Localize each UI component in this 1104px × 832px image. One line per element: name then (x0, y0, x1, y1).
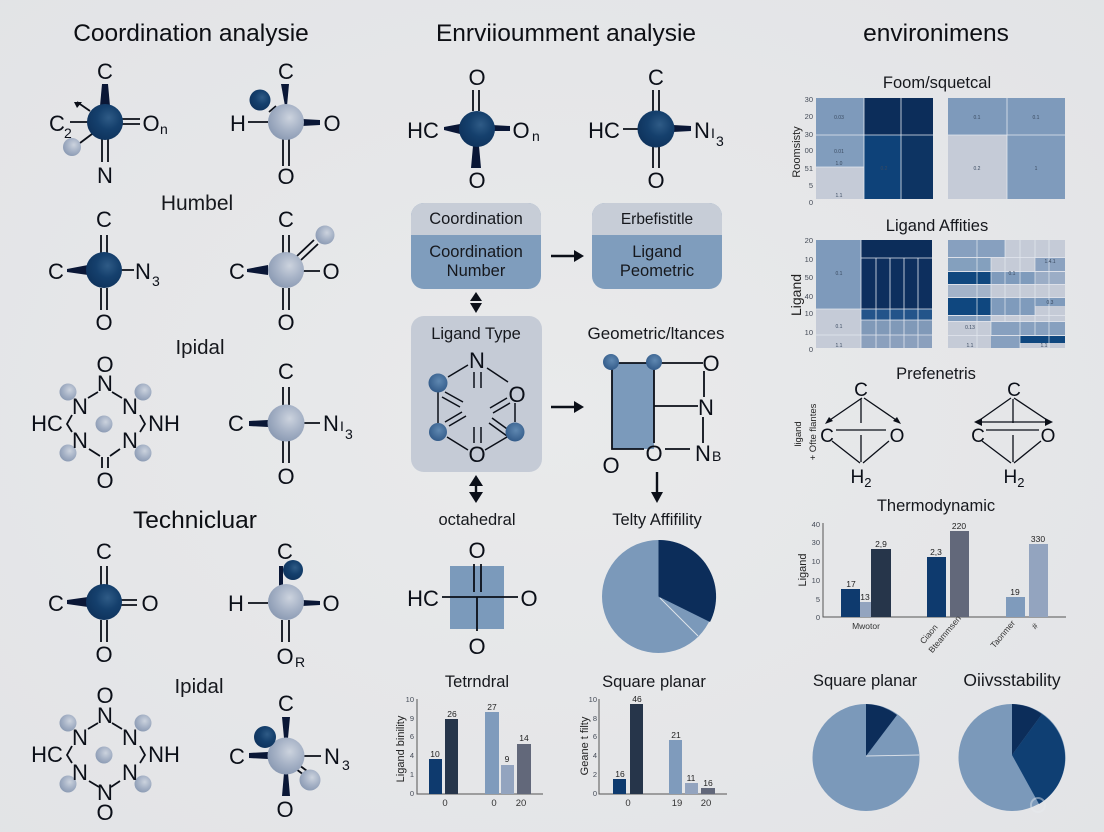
heatmap: top left: 30 (805, 130, 813, 139)
arrow: double vertical lower (469, 475, 483, 503)
bar chart: tetrahedral: 10 (406, 695, 414, 704)
panel: ligand type box (411, 316, 542, 472)
heatmap: top left: 20 (805, 112, 813, 121)
panel: coordination number box: Coordination (429, 243, 523, 261)
molecule: nitrogen ring lower: N (72, 760, 88, 785)
molecule: nitrogen ring lower: O (96, 683, 114, 708)
bar chart: square planar: 0 (625, 798, 631, 809)
panel: ligand geometric box: Peometric (620, 262, 694, 280)
molecule: light centre with two spheres: C (229, 744, 245, 769)
bar chart: square planar: 46 (632, 694, 642, 704)
heading: geometric distances: Geometric/ltances (588, 324, 724, 343)
diagram: left diamond: + Ofte flantes (808, 403, 819, 460)
molecule: nitrogen ring lower: N (72, 725, 88, 750)
molecule: dark centre C N3: N (135, 259, 151, 284)
heatmap: middle left: 50 (805, 273, 813, 282)
arrow: down to affinity (651, 472, 663, 503)
diagram: geometric square: O (702, 351, 720, 376)
molecule: nitrogen ring upper: NH (148, 411, 180, 436)
pie chart: square planar (812, 704, 920, 811)
molecule: HC NI3 dark: HC (588, 118, 620, 143)
molecule: nitrogen ring lower: NH (148, 742, 180, 767)
diagram: right diamond: O (1041, 426, 1055, 447)
molecule: nitrogen ring upper: N (72, 428, 88, 453)
bar chart: thermodynamic: 330 (1031, 534, 1045, 544)
bar chart: thermodynamic: Ligand (797, 553, 809, 587)
bar chart: tetrahedral: 0 (442, 798, 448, 809)
molecule: light centre C N3 (228, 359, 353, 489)
heatmap: top left: 5 (809, 181, 813, 190)
heatmap: middle left: 10 (805, 255, 813, 264)
diagram: right diamond (971, 380, 1055, 490)
panel: ligand geometric box: Erbefistitle (621, 211, 693, 228)
molecule: nitrogen ring lower: O (96, 800, 114, 825)
molecule: nitrogen ring upper: N (122, 394, 138, 419)
molecule: dark centre C N3: O (95, 310, 113, 335)
molecule: nitrogen ring lower: N (97, 703, 113, 728)
molecule: light centre with small sphere: O (322, 259, 340, 284)
bar chart: tetrahedral: 14 (519, 733, 529, 743)
bar chart: thermodynamic (797, 520, 1066, 655)
molecule: light centre C N3: O (277, 464, 295, 489)
diagram: left diamond (793, 380, 904, 490)
bar chart: thermodynamic: 17 (846, 579, 856, 589)
heatmap: top left: 0.01 (834, 149, 844, 155)
diagram: left diamond: C (854, 380, 868, 401)
molecule: dark centre C2 Oh N: O (142, 111, 160, 136)
bar chart: thermodynamic: 40 (812, 520, 820, 529)
molecule: light centre with two spheres: 3 (342, 757, 350, 773)
panel: ligand geometric box (592, 203, 722, 289)
molecule: HC Oh dark (407, 65, 540, 193)
heatmap: top left: 30 (805, 95, 813, 104)
molecule: dark centre C O: O (95, 642, 113, 667)
diagram: geometric square: B (712, 448, 721, 464)
molecule: light centre with two spheres (229, 691, 350, 822)
molecule: light centre with two spheres: N (324, 744, 340, 769)
molecule: dark centre C N3: C (96, 207, 112, 232)
panel: coordination number box: Number (447, 262, 506, 280)
bar chart: square planar: 11 (687, 773, 696, 783)
molecule: light centre with dark sphere: H (228, 591, 244, 616)
bar chart: thermodynamic: 220 (952, 521, 966, 531)
molecule: light centre with dark sphere: R (295, 654, 305, 670)
panel: ligand geometric box: Ligand (632, 243, 682, 261)
diagram: right diamond: H (1004, 467, 1017, 488)
molecule: HC NI3 dark: O (647, 168, 665, 193)
molecule: octahedral square: HC (407, 586, 439, 611)
molecule: HC NI3 dark: I (711, 125, 715, 141)
panel: coordination number box: Coordination (429, 210, 523, 228)
title: coordination analysis: Coordination analysie (73, 20, 309, 47)
heatmap: middle left: Ligand (788, 274, 804, 316)
heatmap: top left: 0.2 (881, 166, 888, 172)
bar chart: thermodynamic: 19 (1010, 587, 1020, 597)
bar chart: tetrahedral: 4 (410, 751, 414, 760)
bar chart: square planar: 16 (615, 769, 625, 779)
bar chart: tetrahedral: 10 (430, 749, 440, 759)
molecule: nitrogen ring upper: N (97, 371, 113, 396)
molecule: HC Oh dark: HC (407, 118, 439, 143)
molecule: dark centre C N3 (48, 207, 160, 335)
bar chart: thermodynamic: 2,9 (875, 539, 887, 549)
molecule: HC NI3 dark: C (648, 65, 664, 90)
heatmap: middle left: 20 (805, 236, 813, 245)
heatmap: top right: 0.2 (974, 166, 981, 172)
heatmap: middle left: 0.1 (836, 271, 843, 277)
molecule: light centre C N3: N (323, 411, 339, 436)
diagram: left diamond: C (820, 426, 834, 447)
heatmap: top left: 0.03 (834, 115, 844, 121)
heading: Technicluar: Technicluar (133, 507, 257, 534)
bar chart: thermodynamic: Ciaon (918, 622, 940, 646)
heading: affinity: Telty Affifility (612, 511, 703, 529)
bar chart: square planar: 10 (589, 695, 597, 704)
molecule: octahedral square: O (468, 634, 486, 659)
molecule: HC Oh dark: O (468, 168, 486, 193)
bar chart: square planar: 20 (701, 798, 711, 809)
heading: overstability: Oiivsstability (963, 670, 1061, 690)
heading: Ipidal: Ipidal (175, 336, 225, 359)
panel: ligand type box: O (468, 442, 486, 467)
molecule: dark centre C O: C (48, 591, 64, 616)
bar chart: tetrahedral: 20 (516, 798, 526, 809)
heatmap: top left: Roomsisty (791, 126, 803, 178)
heatmap: middle left: 0.1 (836, 324, 843, 330)
bar chart: thermodynamic: 30 (812, 538, 820, 547)
bar chart: tetrahedral: 1 (410, 770, 414, 779)
molecule: HC Oh dark: O (468, 65, 486, 90)
heatmap: middle right: 1.1 (967, 343, 974, 349)
heatmap: middle left: 10 (805, 328, 813, 337)
title: environment analysis: Enrviioumment analysie (436, 20, 696, 47)
heatmap: middle right (948, 240, 1065, 349)
bar chart: square planar: 4 (593, 751, 597, 760)
molecule: HC NI3 dark (588, 65, 724, 193)
molecule: light centre C N3: I (340, 418, 344, 434)
molecule: light centre with dark sphere: O (322, 591, 340, 616)
heatmap: middle right: 1.4.1 (1044, 259, 1056, 265)
bar chart: square planar: 16 (703, 778, 713, 788)
diagram: geometric square: N (698, 395, 714, 420)
heatmap: middle right: 0.1 (1009, 271, 1016, 277)
diagram: left diamond: 2 (864, 475, 871, 490)
molecule: light centre with small sphere: C (278, 207, 294, 232)
molecule: nitrogen ring upper: O (96, 352, 114, 377)
molecule: light centre H O O: O (277, 164, 295, 189)
heading: tetrahedral: Tetrndral (445, 673, 509, 691)
heatmap: middle left: 10 (805, 309, 813, 318)
bar chart: tetrahedral (395, 695, 543, 809)
heatmap: top right (948, 98, 1065, 199)
heading: ligand affinities: Ligand Affities (886, 217, 988, 235)
molecule: dark centre C2 Oh N: n (160, 121, 168, 137)
molecule: light centre with small sphere: C (229, 259, 245, 284)
bar chart: thermodynamic: 13 (860, 592, 870, 602)
molecule: nitrogen ring upper (31, 352, 180, 493)
diagram: left diamond: H (851, 467, 864, 488)
heading: square planar: Square planar (602, 673, 706, 691)
heatmap: top left: 51 (805, 164, 813, 173)
diagram: geometric square: N (695, 441, 711, 466)
arrow: coordination to ligand geometry (551, 250, 584, 262)
molecule: dark centre C2 Oh N (49, 59, 168, 188)
molecule: dark centre C2 Oh N: C (49, 111, 65, 136)
molecule: dark centre C O (48, 539, 159, 667)
bar chart: tetrahedral: Ligand binility (395, 715, 407, 782)
heatmap: top left: 00 (805, 146, 813, 155)
molecule: dark centre C2 Oh N: N (97, 163, 113, 188)
molecule: nitrogen ring lower: HC (31, 742, 63, 767)
heading: preferentials: Prefenetris (896, 365, 976, 383)
diagram: geometric square: O (602, 453, 620, 478)
molecule: nitrogen ring upper: N (72, 394, 88, 419)
bar chart: square planar: 8 (593, 714, 597, 723)
bar chart: thermodynamic: 10 (812, 576, 820, 585)
heatmap: top left: 1.1 (836, 193, 843, 199)
molecule: light centre H O O: C (278, 59, 294, 84)
molecule: nitrogen ring upper: N (122, 428, 138, 453)
heatmap: top right: 0.1 (1033, 115, 1040, 121)
heatmap: top right: 0.1 (974, 115, 981, 121)
bar chart: thermodynamic: Mwotor (852, 621, 880, 631)
bar chart: square planar (579, 694, 727, 809)
molecule: octahedral square: O (468, 538, 486, 563)
molecule: light centre with two spheres: C (278, 691, 294, 716)
bar chart: thermodynamic: 2,3 (930, 547, 942, 557)
bar chart: square planar: 19 (672, 798, 682, 809)
heatmap: middle right: 1.1 (1041, 343, 1048, 349)
bar chart: tetrahedral: 0 (491, 798, 497, 809)
heatmap: top left (791, 95, 933, 207)
molecule: HC NI3 dark: 3 (716, 133, 724, 149)
diagram: right diamond: C (1007, 380, 1021, 401)
heading: octahedral: octahedral (438, 511, 516, 529)
heading: form/squetcal: Foom/squetcal (883, 74, 991, 92)
molecule: octahedral square: O (520, 586, 538, 611)
diagram: right diamond: C (971, 426, 985, 447)
bar chart: thermodynamic: # (1029, 621, 1040, 631)
molecule: nitrogen ring lower: N (97, 780, 113, 805)
panel: ligand type box: Ligand Type (431, 325, 521, 343)
diagram: left diamond: O (890, 426, 904, 447)
bar chart: thermodynamic: Bteammsen (926, 613, 963, 655)
molecule: dark centre C O: C (96, 539, 112, 564)
molecule: octahedral square (407, 538, 538, 659)
molecule: light centre H O O (230, 59, 341, 189)
molecule: light centre with small sphere (229, 207, 340, 335)
molecule: light centre with dark sphere (228, 539, 340, 670)
bar chart: tetrahedral: 9 (410, 714, 414, 723)
molecule: light centre H O O: H (230, 111, 246, 136)
molecule: dark centre C N3: 3 (152, 273, 160, 289)
heatmap: middle left: 1.1 (836, 343, 843, 349)
molecule: HC NI3 dark: N (694, 118, 710, 143)
molecule: HC Oh dark: n (532, 128, 540, 144)
bar chart: square planar: 6 (593, 732, 597, 741)
molecule: dark centre C2 Oh N: C (97, 59, 113, 84)
title: environments: environimens (863, 20, 1009, 47)
pie chart: overstability (958, 704, 1066, 811)
heatmap: middle left (788, 236, 932, 354)
watermark: Grok (1031, 798, 1090, 815)
heading: Humbel: Humbel (161, 192, 233, 215)
diagram: right diamond: 2 (1017, 475, 1024, 490)
molecule: HC Oh dark: O (512, 118, 530, 143)
heading: square planar right: Square planar (813, 671, 918, 690)
molecule: dark centre C2 Oh N: 2 (64, 125, 72, 141)
bar chart: thermodynamic: 10 (812, 557, 820, 566)
molecule: light centre with dark sphere: C (277, 539, 293, 564)
heatmap: top left: 1.0 (836, 161, 843, 167)
bar chart: thermodynamic: 5 (816, 595, 820, 604)
molecule: dark centre C N3: C (48, 259, 64, 284)
molecule: nitrogen ring lower: N (122, 760, 138, 785)
molecule: light centre H O O: O (323, 111, 341, 136)
bar chart: square planar: Geane t filty (579, 716, 591, 775)
bar chart: tetrahedral: 9 (505, 754, 510, 764)
molecule: nitrogen ring upper: HC (31, 411, 63, 436)
bar chart: square planar: 2 (593, 770, 597, 779)
heatmap: middle left: 0 (809, 345, 813, 354)
heatmap: top left: 0 (809, 198, 813, 207)
molecule: light centre C N3: 3 (345, 426, 353, 442)
bar chart: tetrahedral: 6 (410, 732, 414, 741)
heatmap: middle left: 40 (805, 292, 813, 301)
pie chart: affinity (602, 540, 716, 653)
molecule: dark centre C O: O (141, 591, 159, 616)
panel: ligand type box: O (508, 382, 526, 407)
bar chart: thermodynamic: 0 (816, 613, 820, 622)
molecule: light centre C N3: C (228, 411, 244, 436)
panel: ligand type box: N (469, 348, 485, 373)
molecule: nitrogen ring upper: O (96, 468, 114, 493)
molecule: nitrogen ring lower (31, 683, 180, 825)
molecule: light centre with two spheres: O (276, 797, 294, 822)
heading: Ipidal lower: Ipidal (174, 675, 224, 698)
heatmap: middle right: 0.3 (1047, 300, 1054, 306)
bar chart: square planar: 21 (671, 730, 681, 740)
watermark: Grok: Grok (1054, 798, 1090, 815)
diagram: left diamond: ligand (793, 421, 804, 447)
heading: thermodynamic: Thermodynamic (877, 497, 995, 515)
diagram: geometric square (602, 351, 721, 478)
panel: coordination number box (411, 203, 541, 289)
bar chart: square planar: 0 (593, 789, 597, 798)
molecule: light centre with dark sphere: O (276, 644, 294, 669)
heatmap: middle right: 0.13 (965, 325, 975, 331)
bar chart: thermodynamic: Taonmer (988, 618, 1017, 650)
molecule: nitrogen ring lower: N (122, 725, 138, 750)
molecule: light centre C N3: C (278, 359, 294, 384)
diagram: geometric square: O (645, 441, 663, 466)
bar chart: tetrahedral: 26 (447, 709, 457, 719)
molecule: light centre with small sphere: O (277, 310, 295, 335)
bar chart: tetrahedral: 27 (487, 702, 497, 712)
arrow: ligand type to geometry (551, 401, 584, 413)
bar chart: tetrahedral: 0 (410, 789, 414, 798)
heatmap: top right: 1 (1035, 166, 1038, 172)
arrow: double vertical upper (470, 292, 482, 313)
